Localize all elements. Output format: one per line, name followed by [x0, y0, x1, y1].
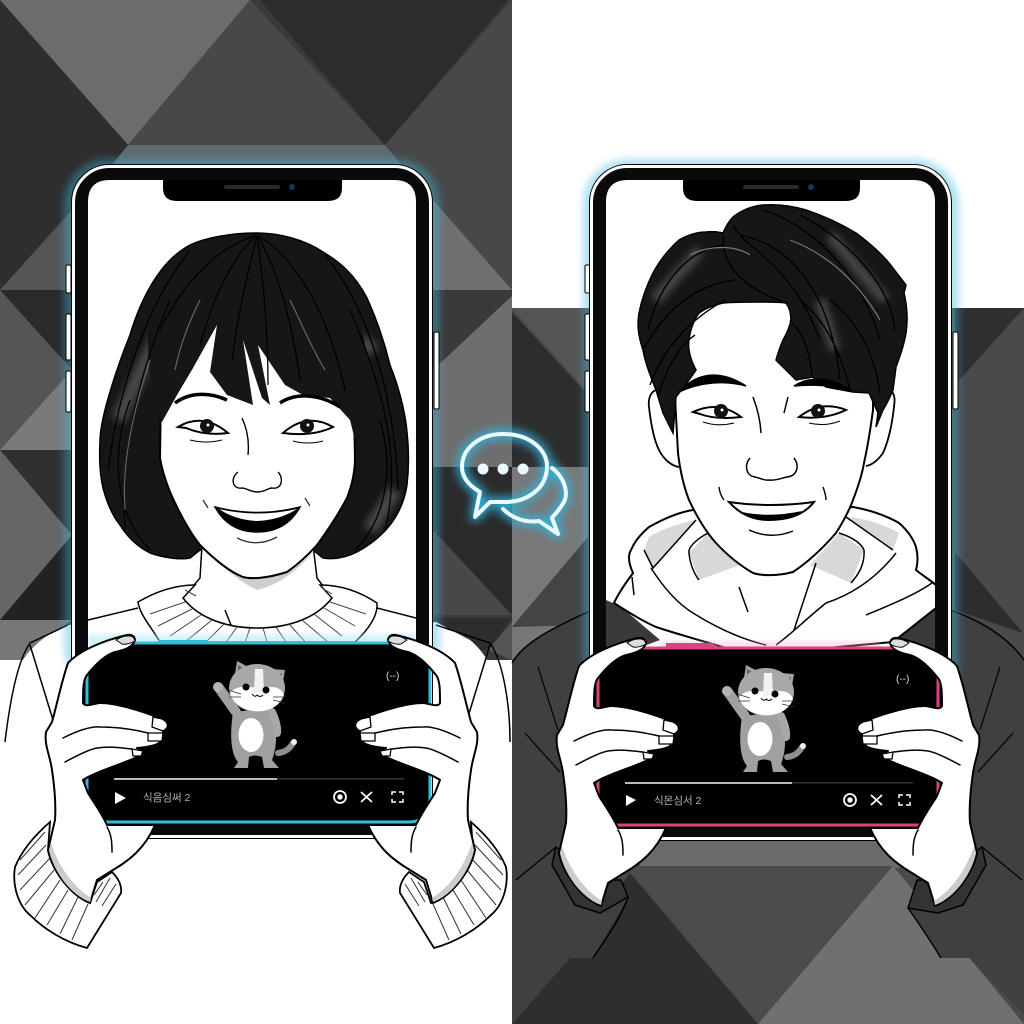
hood inner shading [644, 517, 899, 583]
hair strands [643, 210, 895, 395]
dark shoulders [606, 600, 935, 650]
man nose [747, 397, 797, 480]
bangs [148, 296, 366, 440]
background: left triangle pattern [0, 0, 512, 660]
sweater collar [138, 585, 377, 645]
right phone [585, 164, 958, 840]
hair strands [108, 235, 398, 550]
background: right triangle pattern [512, 308, 1024, 1024]
hoodie [614, 507, 936, 652]
man: hoodie torso and sleeves [512, 610, 1024, 1024]
shuffle icon [361, 792, 372, 802]
chat bubbles icon [462, 434, 566, 534]
speaker and camera [226, 184, 295, 190]
main speech bubble [462, 434, 547, 517]
ears [649, 390, 895, 467]
video title: 식음심써 2 [143, 792, 191, 804]
phone glow: cyan [70, 165, 434, 685]
face [160, 320, 355, 578]
man eyebrows [679, 375, 853, 392]
shuffle icon [871, 795, 882, 805]
man: right cuff [908, 847, 986, 913]
woman nose [233, 418, 281, 492]
play icon [115, 792, 126, 804]
woman eyes [178, 419, 333, 443]
cat character [213, 661, 297, 768]
man: right hand [858, 638, 979, 906]
side buttons [66, 265, 439, 412]
left phone [66, 164, 439, 838]
side buttons [585, 265, 958, 412]
expand icon: (--) [896, 674, 909, 685]
fullscreen icon [899, 795, 910, 805]
woman: left hand [46, 635, 167, 903]
cat character [722, 665, 806, 772]
speaker and camera [745, 184, 814, 190]
hair [638, 205, 907, 433]
face shadow under chin [223, 550, 315, 590]
video player panel [87, 642, 430, 822]
woman eyebrows [175, 394, 340, 407]
video player panel [598, 645, 938, 825]
bubble glow [462, 434, 566, 534]
record icon [844, 794, 856, 806]
typing dots [478, 464, 528, 474]
phone body [72, 164, 432, 838]
progress bar [114, 778, 404, 780]
back hair [100, 233, 408, 559]
screen tint above player [88, 634, 416, 648]
man: left cuff [552, 847, 628, 913]
neck [202, 549, 313, 551]
woman: right hand [356, 635, 477, 903]
man eyes [693, 404, 846, 425]
hair sheen [655, 235, 885, 350]
notch [163, 180, 342, 201]
hair sheen [118, 300, 395, 530]
phone glow: pink [436, 420, 440, 640]
man mouth [719, 487, 826, 535]
portrait: man [606, 205, 936, 660]
phone screen [88, 180, 416, 660]
woman: sweater torso [5, 622, 511, 800]
phone glow: cyan [589, 165, 953, 705]
expand icon: (--) [386, 671, 399, 682]
record icon [334, 791, 346, 803]
phone screen [606, 180, 936, 660]
man: left hand [557, 638, 678, 906]
fullscreen icon [392, 792, 403, 802]
screen tint above player [660, 641, 880, 649]
portrait: woman [88, 233, 416, 660]
hood lines [632, 517, 932, 645]
woman mouth [203, 498, 310, 543]
phone body [590, 164, 952, 840]
progress bar [625, 782, 913, 784]
woman: left sweater cuff [14, 822, 121, 948]
notch [683, 180, 860, 201]
face [675, 400, 874, 576]
play icon [626, 795, 636, 806]
woman: right sweater cuff [400, 822, 507, 948]
secondary speech bubble [503, 468, 566, 534]
shoulders [88, 606, 416, 660]
video title: 식몬심서 2 [654, 795, 702, 807]
